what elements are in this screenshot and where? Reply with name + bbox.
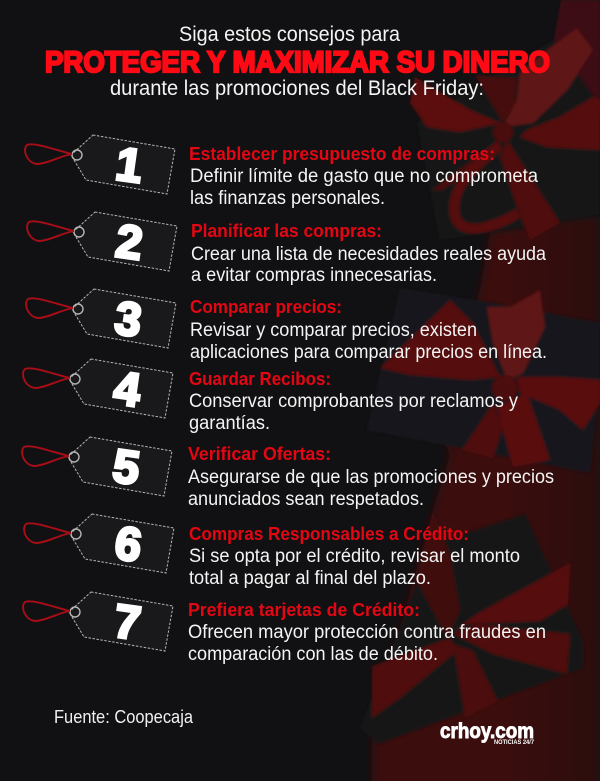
gift box: top xyxy=(410,28,600,240)
tip 3: Revisar y comparar precios, existen xyxy=(190,320,477,341)
tip 4: Conservar comprobantes por reclamos y xyxy=(189,391,518,412)
gift box: middle xyxy=(367,288,600,473)
tip 7: comparación con las de débito. xyxy=(188,644,438,665)
tip 1: Establecer presupuesto de compras: xyxy=(189,144,495,164)
tip 2: a evitar compras innecesarias. xyxy=(191,265,437,286)
tip 4 xyxy=(189,369,518,434)
tip 7: Prefiera tarjetas de Crédito: xyxy=(188,600,420,620)
tag 2: 2 xyxy=(113,214,146,270)
logo: crhoy.com: NOTICIAS 24/7 xyxy=(494,740,535,746)
tip 1: Definir límite de gasto que no comprometa xyxy=(190,166,538,187)
tag 3 xyxy=(26,289,176,348)
tag 5: 5 xyxy=(110,439,143,495)
tip 6 xyxy=(189,524,520,589)
tag 5 xyxy=(22,437,172,496)
tag 4: 4 xyxy=(111,361,144,417)
tag 7: 7 xyxy=(111,594,144,650)
tip 5: Verificar Ofertas: xyxy=(188,444,331,464)
tag 4 xyxy=(23,359,173,418)
tip 2: Planificar las compras: xyxy=(191,221,382,241)
tip 7 xyxy=(188,600,546,665)
title xyxy=(45,23,550,100)
tag 3: 3 xyxy=(112,291,145,347)
tip 3 xyxy=(190,297,547,363)
tip 5: anunciados sean respetados. xyxy=(188,489,424,510)
tip 2: Crear una lista de necesidades reales ayuda xyxy=(191,244,546,265)
tip 6: Si se opta por el crédito, revisar el monto xyxy=(189,546,520,567)
tip 4: Guardar Recibos: xyxy=(189,369,331,389)
gift box: bottom xyxy=(360,511,583,744)
tip 5 xyxy=(188,444,554,510)
tag 1: 1 xyxy=(113,137,146,193)
logo: crhoy.com: crhoy.com xyxy=(440,720,534,743)
tip 6: total a pagar al final del plazo. xyxy=(189,568,431,589)
tip 4: garantías. xyxy=(189,413,270,434)
tip 3: aplicaciones para comparar precios en línea. xyxy=(190,342,547,363)
tag 6 xyxy=(24,514,174,573)
tip 6: Compras Responsables a Crédito: xyxy=(189,524,469,544)
tip 1 xyxy=(189,144,538,209)
tag 6: 6 xyxy=(112,516,145,572)
tip 5: Asegurarse de que las promociones y precios xyxy=(188,467,554,488)
main heading: PROTEGER Y MAXIMIZAR SU DINERO xyxy=(45,46,550,79)
tag 7 xyxy=(23,592,173,651)
tip 3: Comparar precios: xyxy=(190,297,342,317)
intro line: Siga estos consejos para xyxy=(179,23,400,46)
tip 7: Ofrecen mayor protección contra fraudes en xyxy=(188,622,546,643)
subtitle: durante las promociones del Black Friday: xyxy=(110,77,484,100)
tip 1: las finanzas personales. xyxy=(190,188,385,209)
tip 2 xyxy=(191,221,546,286)
tag 1 xyxy=(25,135,175,194)
source: Fuente: Coopecaja xyxy=(54,707,194,727)
tag 2 xyxy=(27,212,177,271)
